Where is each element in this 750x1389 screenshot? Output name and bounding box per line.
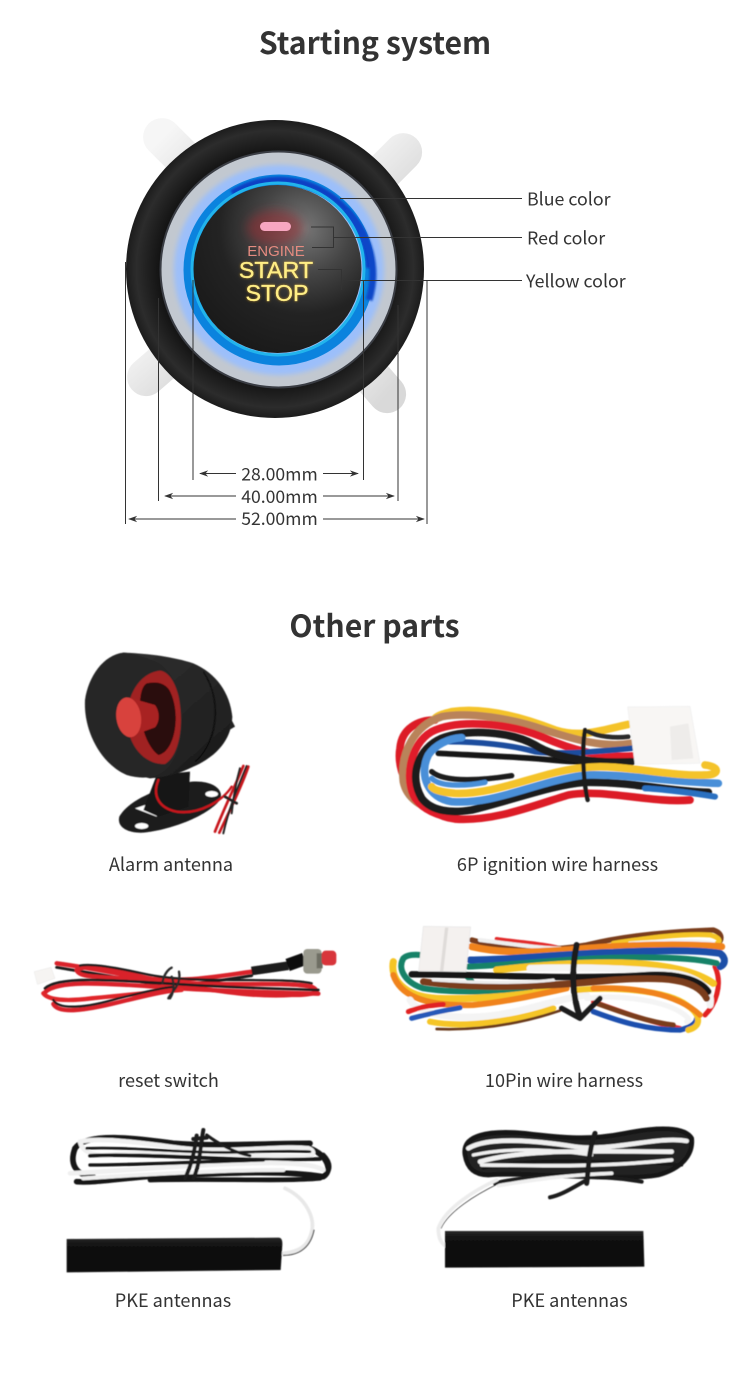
label: 6P ignition wire harness: 6P ignition wire harness — [457, 851, 658, 877]
callout lines — [311, 198, 522, 290]
callout: Yellow color: Yellow color — [525, 268, 626, 294]
label: Alarm antenna: Alarm antenna — [109, 851, 233, 877]
panel: other parts — [34, 602, 724, 1313]
button label: STOP — [245, 280, 309, 306]
callout: Red color: Red color — [527, 224, 605, 250]
dimension: 28mm: 28.00mm — [241, 462, 318, 486]
panel: starting system — [126, 19, 626, 531]
grey ring — [160, 152, 396, 388]
part: reset switch — [34, 949, 336, 1010]
part: alarm siren — [85, 653, 248, 833]
heading: Other parts: Other parts — [289, 602, 460, 646]
label: PKE antennas: PKE antennas — [115, 1287, 231, 1313]
button face — [194, 185, 362, 353]
dimension extension lines — [126, 262, 427, 524]
blue glow ring — [174, 165, 384, 375]
outer black bezel — [126, 120, 424, 418]
dimension: 52mm: 52.00mm — [241, 506, 318, 531]
button label — [239, 243, 313, 306]
part: 6P ignition wire harness — [399, 706, 718, 819]
label: 10Pin wire harness: 10Pin wire harness — [485, 1067, 643, 1093]
button label: ENGINE — [247, 243, 305, 260]
cyan light ring — [189, 180, 369, 360]
callout: Blue color: Blue color — [527, 186, 611, 212]
dimension: 40mm: 40.00mm — [241, 484, 318, 509]
icon: mounting tabs — [146, 137, 403, 394]
part: PKE antenna left — [67, 1130, 329, 1272]
part: PKE antenna right — [438, 1129, 692, 1268]
red indicator — [247, 210, 303, 246]
button photo — [126, 120, 424, 418]
heading: Starting system: Starting system — [259, 19, 491, 63]
part: 10Pin wire harness — [393, 926, 724, 1030]
button label: START — [239, 257, 313, 283]
label: reset switch: reset switch — [118, 1067, 219, 1093]
label: PKE antennas: PKE antennas — [511, 1287, 628, 1313]
